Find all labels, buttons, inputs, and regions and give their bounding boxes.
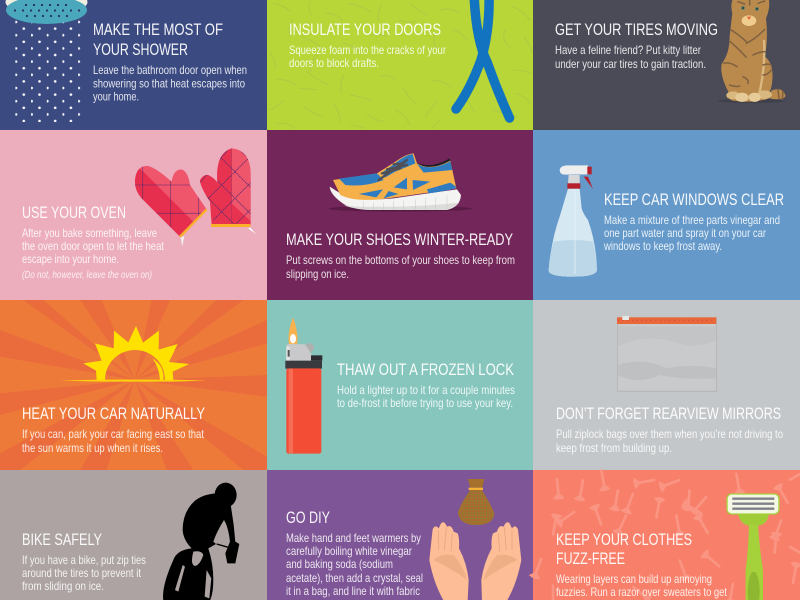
text block: the oven door open to let the heat (22, 239, 165, 253)
panel: don't forget rearview mirrors (533, 300, 800, 470)
icon: shower head with water drops (6, 0, 88, 122)
panel: bike safely (0, 470, 267, 600)
text block (289, 43, 446, 70)
text block: acetate), then add a crystal, seal (286, 571, 423, 585)
heading (93, 21, 223, 59)
text block (22, 553, 146, 593)
text block: slipping on ice. (286, 267, 349, 281)
panel: go diy (267, 470, 533, 600)
text block: from sliding on ice. (22, 579, 104, 593)
text block: After you bake something, leave (22, 226, 157, 240)
icon: hands holding a warmer pouch (429, 479, 521, 600)
text block (603, 213, 780, 253)
heading: BIKE SAFELY (22, 531, 102, 549)
text block (93, 63, 247, 104)
heading: KEEP YOUR CLOTHES (556, 531, 692, 549)
panel: use your oven (0, 130, 273, 300)
text block: Squeeze foam into the cracks of your (289, 43, 446, 57)
heading: FUZZ-FREE (556, 550, 625, 568)
text block: escape into your home. (22, 252, 119, 266)
icon: running shoe (329, 153, 472, 212)
text block: to de-frost it before trying to use your key. (337, 396, 513, 410)
heading: HEAT YOUR CAR NATURALLY (22, 405, 205, 423)
text block (555, 43, 706, 71)
text block: Make hand and feet warmers by (286, 531, 421, 545)
panel: keep your clothes fuzz-free (528, 464, 800, 600)
icon: tabby cat (718, 0, 786, 103)
text block: If you can, park your car facing east so that (22, 427, 205, 441)
icon: oven mitts (134, 148, 256, 246)
icon: ziplock bag (617, 316, 717, 392)
heading: USE YOUR OVEN (22, 204, 126, 222)
text block: Leave the bathroom door open when (93, 63, 247, 77)
icon: lighter (285, 317, 322, 454)
heading: THAW OUT A FROZEN LOCK (337, 361, 514, 379)
text block: Wearing layers can build up annoying (556, 572, 712, 586)
text block (286, 253, 515, 281)
heading: GO DIY (286, 509, 330, 527)
text block: Put screws on the bottoms of your shoes to keep from (286, 253, 515, 267)
panel: thaw out a frozen lock (267, 300, 533, 470)
heading: GET YOUR TIRES MOVING (555, 21, 718, 39)
text block: Have a feline friend? Put kitty litter (555, 43, 701, 57)
panel: make the most of your shower (0, 0, 267, 130)
icon: blue weatherstrip foam (456, 0, 510, 118)
text block: Hold a lighter up to it for a couple minutes (337, 383, 515, 397)
heading: MAKE THE MOST OF (93, 21, 223, 39)
text block: If you have a bike, put zip ties (22, 553, 146, 567)
icon: cyclist silhouette (163, 483, 239, 600)
panel: keep car windows clear (533, 130, 800, 300)
pattern: razors (528, 464, 800, 600)
panel: insulate your doors (267, 0, 533, 130)
text block (556, 427, 783, 455)
text block: under your car tires to gain traction. (555, 57, 706, 71)
text block: windows to keep frost away. (603, 239, 722, 253)
text block (556, 572, 728, 599)
text block: your home. (93, 90, 139, 104)
panel: make your shoes winter-ready (267, 130, 533, 300)
icon: green razor (727, 494, 779, 600)
heading: YOUR SHOWER (93, 41, 188, 59)
text block: showering so that heat escapes into (93, 76, 245, 90)
panel: heat your car naturally (0, 300, 267, 470)
text block: doors to block drafts. (289, 56, 379, 70)
text block (337, 383, 515, 410)
text block: fuzzies. Run a razor over sweaters to get (556, 585, 728, 599)
text block: keep frost from building up. (556, 441, 672, 455)
pattern: foam squiggles (270, 2, 532, 128)
text block (22, 226, 165, 266)
text block: around the tires to prevent it (22, 566, 142, 580)
text block: and baking soda (sodium (286, 557, 393, 571)
text block (286, 531, 423, 598)
text block (22, 427, 205, 455)
panel: get your tires moving (533, 0, 800, 130)
text block: the sun warms it up when it rises. (22, 441, 163, 455)
text block: it in a bag, and line it with fabric (286, 584, 420, 598)
note: (Do not, however, leave the oven on) (22, 270, 152, 281)
heading: MAKE YOUR SHOES WINTER-READY (286, 231, 513, 249)
icon: rising sun with rays (0, 300, 267, 470)
heading: INSULATE YOUR DOORS (289, 21, 441, 39)
icon: spray bottle (549, 165, 597, 277)
heading (556, 531, 692, 568)
text block: carefully boiling white vinegar (286, 544, 412, 558)
